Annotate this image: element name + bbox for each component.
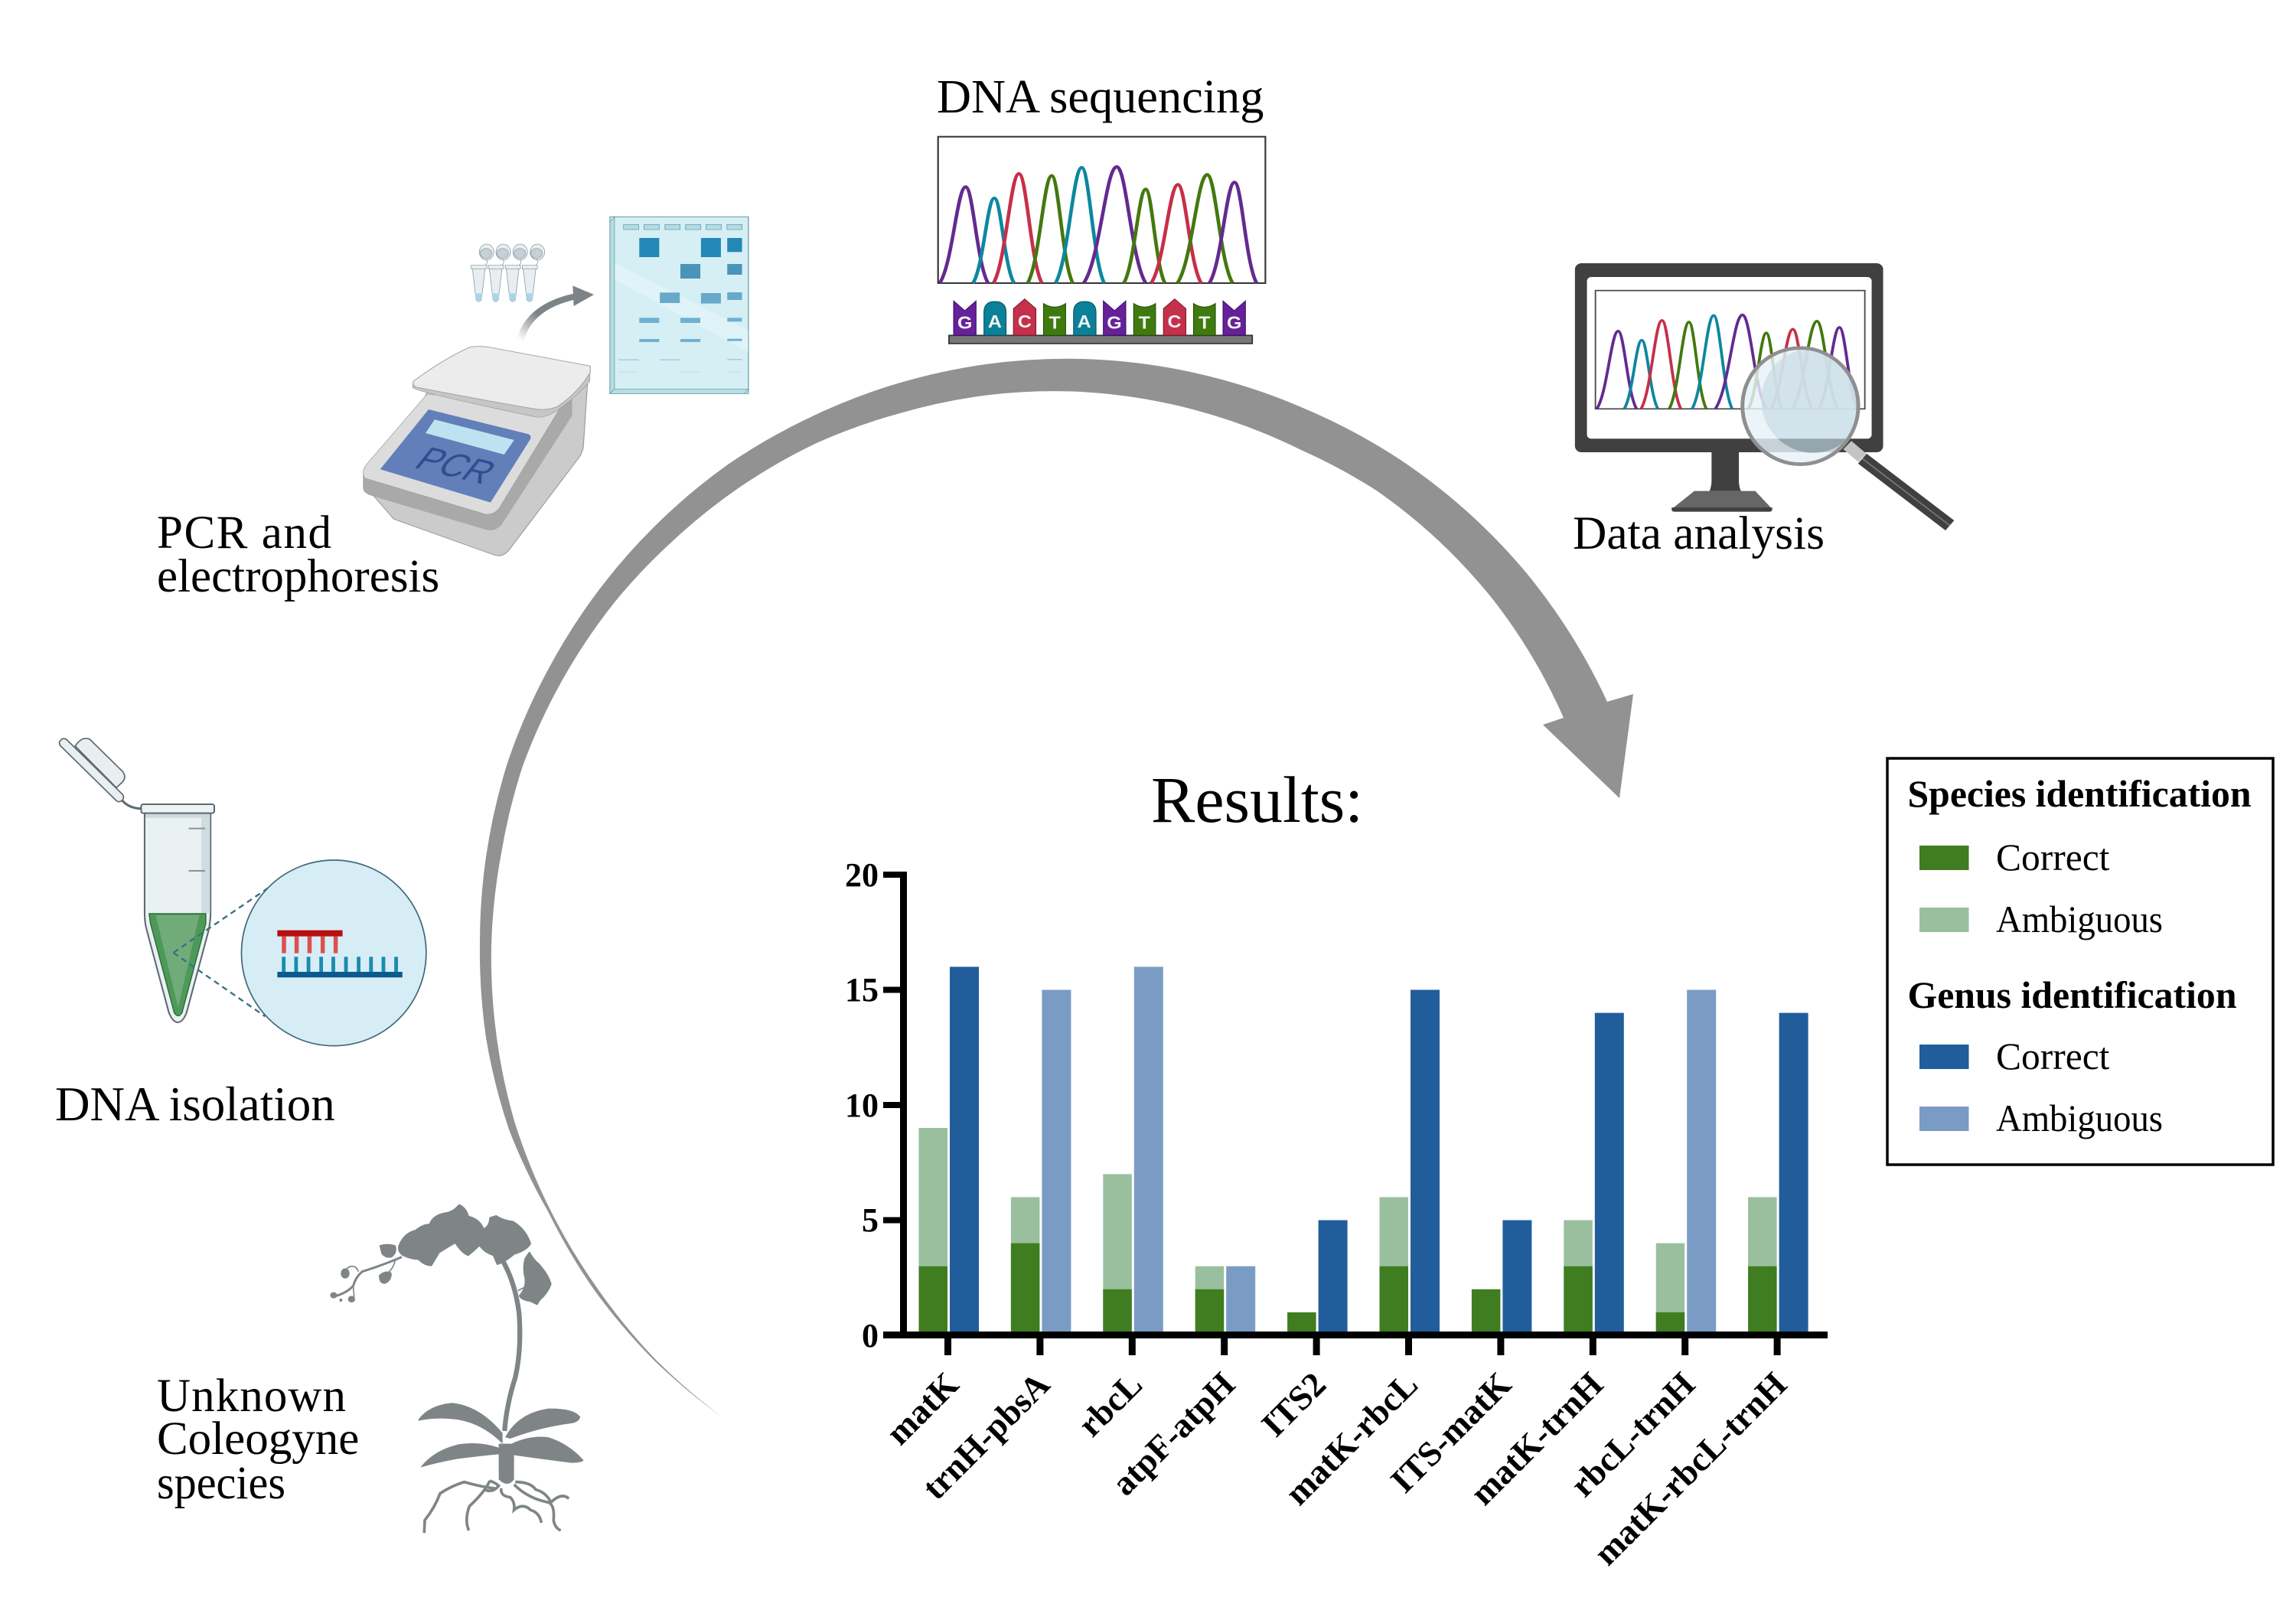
sequence tiles: G A C T A G T C T G: G <box>957 313 972 333</box>
y-axis numbers: 10 <box>845 1087 879 1124</box>
label: Unknown Coleogyne species: Unknown <box>157 1371 346 1422</box>
label: PCR and electrophoresis: electrophoresis <box>157 551 439 602</box>
sequence tiles: G A C T A G T C T G: T <box>1049 313 1061 333</box>
x-axis labels: trnH-pbsA <box>915 1364 1057 1507</box>
bars: species and genus counts <box>918 966 1808 1335</box>
y-axis numbers: 20 <box>845 856 879 894</box>
icon: PCR machine, tubes and gel <box>363 217 748 556</box>
sequence tiles: G A C T A G T C T G: C <box>1018 312 1032 332</box>
sequence tiles: G A C T A G T C T G <box>949 299 1252 344</box>
icon: electrophoresis gel <box>610 217 748 393</box>
panel: legend: Correct <box>1996 1035 2110 1077</box>
y-axis numbers: 0 <box>862 1317 879 1354</box>
panel: legend: Genus identification <box>1907 973 2237 1016</box>
panel: legend: Correct <box>1996 836 2110 878</box>
x-axis labels: ITS-matK <box>1383 1364 1518 1500</box>
x-axis labels: ITS2 <box>1254 1364 1333 1444</box>
sequence tiles: G A C T A G T C T G: G <box>1227 313 1241 333</box>
icon: microcentrifuge tube <box>60 738 214 1022</box>
x-axis labels: rbcL-trnH <box>1562 1364 1702 1504</box>
panel: legend <box>1887 758 2273 1165</box>
bar chart: identification results <box>845 856 1828 1573</box>
icon: tube with DNA inset <box>60 738 426 1046</box>
sequence tiles: G A C T A G T C T G: A <box>1078 312 1091 332</box>
icon: thermocycler: PCR <box>407 441 504 491</box>
axes <box>883 872 1828 1355</box>
heading: DNA sequencing: DNA sequencing <box>937 70 1264 123</box>
sequence tiles: G A C T A G T C T G: T <box>1199 313 1211 333</box>
sequence tiles: G A C T A G T C T G: A <box>988 312 1002 332</box>
x-axis labels: matK-rbcL-trnH <box>1586 1364 1794 1573</box>
icon: orchid plant <box>330 1205 584 1533</box>
heading: Results: Results: <box>1151 763 1363 836</box>
chromatogram: DNA sequencing <box>938 137 1265 283</box>
panel: legend: Species identification <box>1907 772 2252 815</box>
sequence tiles: G A C T A G T C T G: T <box>1139 313 1150 333</box>
x-axis labels: rbcL <box>1070 1364 1150 1444</box>
icon: thermocycler <box>363 347 590 556</box>
arrow: circular workflow arrow <box>480 359 1633 1417</box>
arrow: tubes to gel <box>520 285 594 340</box>
y-axis numbers: 15 <box>845 971 879 1009</box>
label: Data analysis: Data analysis <box>1573 507 1825 559</box>
panel: legend: Ambiguous <box>1996 898 2163 940</box>
icon: computer monitor with chromatogram and magnifier <box>1575 263 1950 526</box>
callout: zoom lines <box>174 886 270 1016</box>
x-axis labels: matK-trnH <box>1463 1364 1610 1512</box>
icon: magnifying glass <box>1743 348 1950 526</box>
y-axis numbers <box>845 856 879 1354</box>
icon: PCR tube strip <box>471 244 545 302</box>
panel: legend: Ambiguous <box>1996 1097 2163 1139</box>
callout: DNA strand inset <box>241 860 426 1046</box>
x-axis labels: matK <box>878 1364 966 1452</box>
label: Unknown Coleogyne species: Coleogyne <box>157 1413 359 1465</box>
x-axis labels <box>878 1364 1794 1573</box>
label: Unknown Coleogyne species: species <box>157 1458 285 1509</box>
label: PCR and electrophoresis: PCR and <box>157 507 331 559</box>
label: DNA isolation: DNA isolation <box>55 1077 335 1131</box>
x-axis labels: matK-rbcL <box>1277 1364 1425 1512</box>
sequence tiles: G A C T A G T C T G: G <box>1107 313 1122 333</box>
y-axis numbers: 5 <box>862 1201 879 1239</box>
sequence tiles: G A C T A G T C T G: C <box>1167 312 1182 332</box>
x-axis labels: atpF-atpH <box>1104 1364 1242 1503</box>
